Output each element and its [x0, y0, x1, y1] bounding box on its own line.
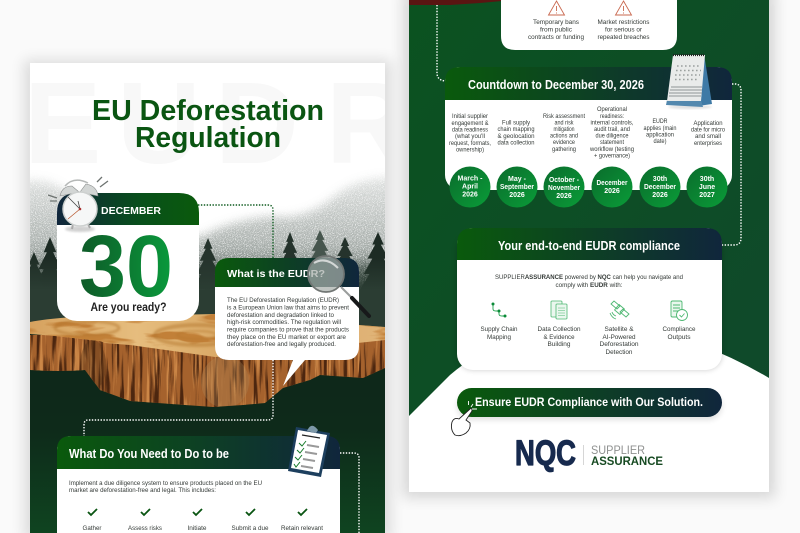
checklist items: Gather [82, 525, 102, 532]
dotted connector: countdown to compliance [722, 84, 741, 245]
panel: countdown [445, 67, 732, 208]
milestone descriptions: Full supply [502, 120, 531, 126]
milestone descriptions: mitigation [554, 126, 575, 133]
heading: Your end-to-end EUDR compliance [498, 238, 680, 253]
milestone: March-April 2026: 2026 [462, 192, 478, 198]
feature: satellite detection: Detection [606, 349, 633, 356]
definition text: require companies to prove that the products [227, 326, 350, 334]
milestone: 30th June 2027: June [699, 184, 715, 191]
penalty: bans: from public [540, 26, 573, 34]
heading: What is the EUDR? [227, 268, 325, 280]
milestone descriptions: date for micro [691, 126, 725, 134]
date number: 30 [79, 218, 173, 315]
heading: Countdown to December 30, 2026 [468, 77, 644, 92]
intro text: comply with EUDR with: [556, 282, 623, 289]
milestone: May-September 2026 [496, 166, 538, 208]
watermark EUDR: U [117, 58, 201, 188]
panel: penalties card [501, 0, 677, 50]
penalty: restrictions: for serious or [605, 26, 643, 34]
forest background [16, 178, 397, 533]
definition text: The EU Deforestation Regulation (EUDR) [227, 297, 339, 304]
milestone: May-September 2026: September [500, 184, 534, 191]
feature: supply chain mapping: Mapping [487, 334, 511, 341]
milestone: March-April 2026 [450, 166, 490, 208]
milestone descriptions: (what you'll [455, 133, 485, 140]
feature: satellite detection: Deforestation [600, 341, 639, 348]
feature: satellite detection: Satellite & [604, 326, 634, 333]
milestone descriptions: internal controls, [590, 120, 634, 126]
watermark EUDR: R [326, 58, 410, 188]
checklist items: Initiate [188, 525, 207, 532]
milestone descriptions: application [646, 132, 674, 138]
milestone descriptions: readiness: [600, 113, 624, 120]
month label: DECEMBER [101, 205, 161, 217]
logo: NQC Supplier Assurance: NQC [515, 434, 576, 473]
prompt: Are you ready? [90, 300, 166, 314]
watermark EUDR [24, 58, 410, 188]
dotted connector: definition to requirements [84, 360, 273, 436]
definition text [227, 297, 350, 348]
milestone descriptions [449, 106, 725, 160]
definition text: deforestation-free and legally produced. [227, 341, 336, 348]
title: Regulation [135, 122, 281, 154]
penalty: bans: Temporary bans [533, 19, 580, 26]
icon: warning triangle [548, 1, 564, 15]
call to action button [457, 388, 722, 420]
milestone: 30th June 2027 [686, 166, 728, 208]
panel: left infographic page [30, 63, 385, 533]
milestone: May-September 2026: 2026 [509, 192, 525, 199]
milestone: 30th June 2027: 30th [700, 176, 714, 183]
feature: data collection: Building [548, 341, 571, 348]
milestone descriptions: audit trail, and [594, 126, 630, 133]
panel: What Do You Need to Do [57, 436, 340, 533]
milestone descriptions: Application [694, 120, 723, 127]
milestone: 30th December 2026: 2026 [652, 192, 668, 199]
icon: magnifying glass [308, 256, 369, 316]
milestone descriptions: + governance) [594, 152, 630, 160]
milestone descriptions: request, formats, [449, 140, 491, 147]
penalty: restrictions: Market restrictions [598, 19, 650, 26]
penalty: bans [528, 19, 584, 41]
dotted connector: requirements onward [340, 453, 359, 533]
feature: compliance outputs: Outputs [668, 334, 691, 341]
panel: December 30 calendar [57, 193, 199, 321]
feature: data collection: & Evidence [544, 334, 575, 341]
panel: right infographic page [409, 0, 769, 492]
milestone: October-November 2026: October - [549, 177, 580, 184]
penalty: restrictions: repeated breaches [598, 34, 650, 41]
milestone: 30th June 2027: 2027 [699, 192, 715, 199]
milestone: October-November 2026: November [548, 185, 580, 192]
heading: What Do You Need to Do to be [69, 447, 229, 461]
checklist items: Submit a due [232, 525, 269, 532]
milestone: March-April 2026: April [462, 184, 478, 190]
penalty: bans: contracts or funding [528, 34, 584, 41]
panel: end-to-end compliance [457, 228, 722, 370]
white base shape [409, 354, 769, 492]
milestone descriptions: Initial supplier [452, 113, 489, 120]
milestone descriptions: & geolocation [498, 133, 535, 140]
milestone: October-November 2026: 2026 [556, 193, 572, 200]
icon: desk calendar [666, 54, 712, 109]
penalty: restrictions [598, 19, 650, 41]
tree stump [30, 314, 385, 408]
milestone descriptions: date) [654, 138, 666, 145]
milestone: October-November 2026 [544, 166, 584, 208]
milestone: 30th December 2026: 30th [653, 176, 667, 183]
feature: satellite detection [600, 301, 639, 356]
definition text: deforestation and degradation linked to [227, 312, 334, 319]
milestone descriptions: due diligence [596, 132, 629, 140]
intro text [69, 480, 262, 494]
milestone descriptions: and small [695, 133, 721, 140]
feature: supply chain mapping [480, 302, 518, 341]
dotted connector: penalties to countdown [437, 5, 445, 81]
milestone descriptions: chain mapping [498, 126, 535, 133]
milestone descriptions: ownership) [456, 146, 484, 154]
milestone descriptions: data readiness [452, 126, 489, 134]
milestone descriptions: Operational [597, 106, 627, 113]
icon: pointing hand [451, 401, 477, 436]
icon: alarm clock [48, 177, 108, 232]
icon: clipboard checklist [288, 426, 330, 477]
milestone descriptions: statement [600, 139, 624, 146]
feature: data collection: Data Collection [538, 326, 581, 333]
milestone: March-April 2026: March - [458, 176, 483, 182]
definition text: high-risk commodities. The regulation will [227, 319, 341, 326]
intro text: market are deforestation-free and legal. This includes: [69, 487, 216, 494]
milestone: May-September 2026: May - [508, 176, 527, 183]
checklist items: Retain relevant [281, 525, 323, 532]
call to action button: Ensure EUDR Compliance with Our Solution. [475, 397, 703, 409]
milestone descriptions: actions and [550, 132, 578, 140]
milestone descriptions: and risk [554, 120, 574, 126]
intro text [495, 274, 683, 289]
milestone descriptions: data collection [498, 140, 535, 146]
intro text: Implement a due diligence system to ensure products placed on the EU [69, 480, 262, 487]
title: EU Deforestation [92, 95, 324, 127]
feature: satellite detection: AI-Powered [602, 334, 636, 341]
feature: compliance outputs: Compliance [662, 326, 696, 333]
milestone descriptions: EUDR [652, 118, 668, 125]
dotted connector: calendar to definition [198, 205, 273, 258]
checklist items: Assess risks [128, 525, 163, 532]
checklist items [82, 509, 323, 532]
milestone: December 2026 [592, 166, 632, 208]
milestone: December 2026: December [596, 180, 628, 187]
logo: NQC Supplier Assurance: SUPPLIER [591, 445, 645, 457]
milestone: 30th December 2026: December [644, 184, 676, 191]
milestone descriptions: Risk assessment [543, 113, 585, 120]
feature: supply chain mapping: Supply Chain [480, 326, 518, 333]
milestone descriptions: gathering [552, 146, 576, 153]
milestone descriptions: evidence [553, 139, 575, 146]
watermark EUDR: D [215, 58, 299, 188]
icon: warning triangle [616, 1, 632, 15]
watermark EUDR: E [24, 58, 101, 188]
feature: compliance outputs [662, 301, 696, 341]
feature: data collection [538, 301, 581, 348]
title [92, 95, 324, 154]
intro text: SUPPLIERASSURANCE powered by NQC can help you navigate and [495, 274, 683, 281]
definition text: is a European Union law that aims to prevent [227, 304, 349, 312]
milestone: December 2026: 2026 [604, 188, 620, 195]
panel: What is the EUDR [215, 258, 359, 386]
milestone descriptions: workflow (testing [589, 146, 634, 153]
logo: NQC Supplier Assurance [515, 434, 663, 473]
milestone descriptions: engagement & [452, 120, 489, 127]
logo: NQC Supplier Assurance: ASSURANCE [591, 456, 663, 468]
milestone descriptions: applies (main [644, 125, 677, 132]
milestone descriptions: enterprises [694, 140, 723, 147]
definition text: they place on the EU market or export are [227, 334, 346, 341]
milestone: 30th December 2026 [640, 166, 680, 208]
stump remnant strip [409, 0, 502, 5]
